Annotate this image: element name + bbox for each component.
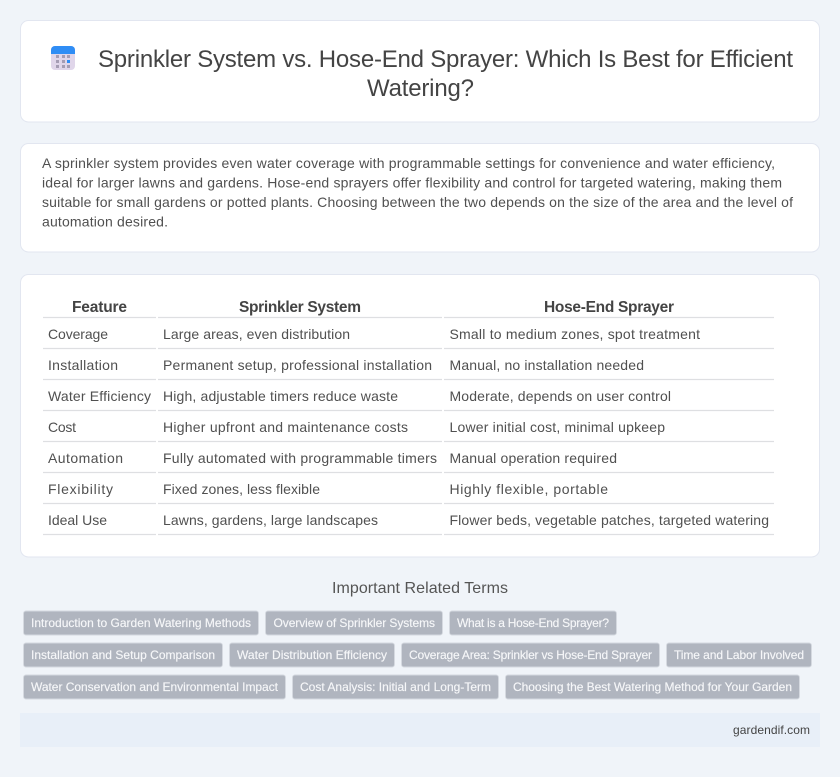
- table header: Feature: [72, 299, 127, 316]
- row: flexibility: Fixed zones, less flexible: [163, 481, 320, 497]
- panel: description: [20, 144, 820, 252]
- title: [98, 46, 793, 102]
- description text: A sprinkler system provides even water coverage with programmable settings for convenience and water efficiency,: [42, 155, 775, 171]
- footer: [20, 713, 820, 747]
- row: cost: Lower initial cost, minimal upkeep: [450, 419, 665, 435]
- tag: What is a Hose-End Sprayer?: [457, 616, 609, 630]
- row: water efficiency: Water Efficiency: [48, 388, 151, 404]
- row: coverage: Coverage: [48, 326, 108, 342]
- heading: important related terms: Important Related Terms: [332, 580, 508, 597]
- row: cost: [48, 419, 665, 435]
- row: ideal use: Flower beds, vegetable patches, targeted watering: [450, 512, 769, 528]
- row: ideal use: Lawns, gardens, large landscapes: [163, 512, 378, 528]
- tag: [450, 611, 616, 635]
- row: flexibility: [48, 481, 608, 497]
- row: ideal use: Ideal Use: [48, 512, 107, 528]
- row: cost: Higher upfront and maintenance costs: [163, 419, 408, 435]
- description text: [42, 155, 793, 230]
- description text: suitable for small gardens or potted plants. Choosing between the two depends on the size of the area and the level of: [42, 194, 793, 210]
- tag: [24, 643, 222, 667]
- row: flexibility: Highly flexible, portable: [450, 481, 608, 497]
- title: Sprinkler System vs. Hose-End Sprayer: Which Is Best for Efficient: [98, 46, 793, 73]
- tag: [292, 675, 498, 699]
- description text: automation desired.: [42, 214, 168, 230]
- tag: Time and Labor Involved: [674, 648, 804, 662]
- table header: Sprinkler System: [239, 299, 361, 316]
- row: installation: [48, 357, 644, 373]
- description text: ideal for larger lawns and gardens. Hose-end sprayers offer flexibility and control for targeted watering, making them: [42, 174, 782, 190]
- row: automation: Automation: [48, 450, 123, 466]
- panel: comparison table: [20, 274, 820, 557]
- tag: Cost Analysis: Initial and Long-Term: [300, 680, 491, 694]
- row: coverage: [48, 326, 700, 342]
- row: ideal use: [48, 512, 769, 528]
- tag: [402, 643, 660, 667]
- icon: calendar: [51, 46, 75, 70]
- table header: [72, 299, 674, 316]
- tag: Overview of Sprinkler Systems: [274, 616, 435, 630]
- tag: Choosing the Best Watering Method for Your Garden: [513, 680, 792, 694]
- footer: gardendif.com: [733, 723, 810, 737]
- row: automation: Manual operation required: [450, 450, 617, 466]
- title: Watering?: [367, 75, 474, 102]
- table header: Hose-End Sprayer: [544, 299, 674, 316]
- row: cost: Cost: [48, 419, 76, 435]
- row: water efficiency: High, adjustable timers reduce waste: [163, 388, 398, 404]
- row: water efficiency: Moderate, depends on user control: [450, 388, 671, 404]
- tag: Installation and Setup Comparison: [31, 648, 215, 662]
- panel: title card: [20, 20, 820, 122]
- row: installation: Installation: [48, 357, 118, 373]
- tag: [230, 643, 394, 667]
- row: coverage: Large areas, even distribution: [163, 326, 350, 342]
- related term tags: [24, 611, 812, 699]
- tag: Water Conservation and Environmental Impact: [31, 680, 279, 694]
- tag: [266, 611, 442, 635]
- row: automation: Fully automated with programmable timers: [163, 450, 437, 466]
- tag: Coverage Area: Sprinkler vs Hose-End Sprayer: [409, 648, 652, 662]
- row: installation: Permanent setup, professional installation: [163, 357, 432, 373]
- row: automation: [48, 450, 617, 466]
- row: flexibility: Flexibility: [48, 481, 113, 497]
- tag: [666, 643, 812, 667]
- tag: Introduction to Garden Watering Methods: [31, 616, 251, 630]
- tag: [24, 611, 258, 635]
- row: coverage: Small to medium zones, spot treatment: [450, 326, 700, 342]
- row: installation: Manual, no installation needed: [450, 357, 644, 373]
- row: water efficiency: [48, 388, 671, 404]
- tag: Water Distribution Efficiency: [237, 648, 387, 662]
- tag: [24, 675, 286, 699]
- tag: [506, 675, 800, 699]
